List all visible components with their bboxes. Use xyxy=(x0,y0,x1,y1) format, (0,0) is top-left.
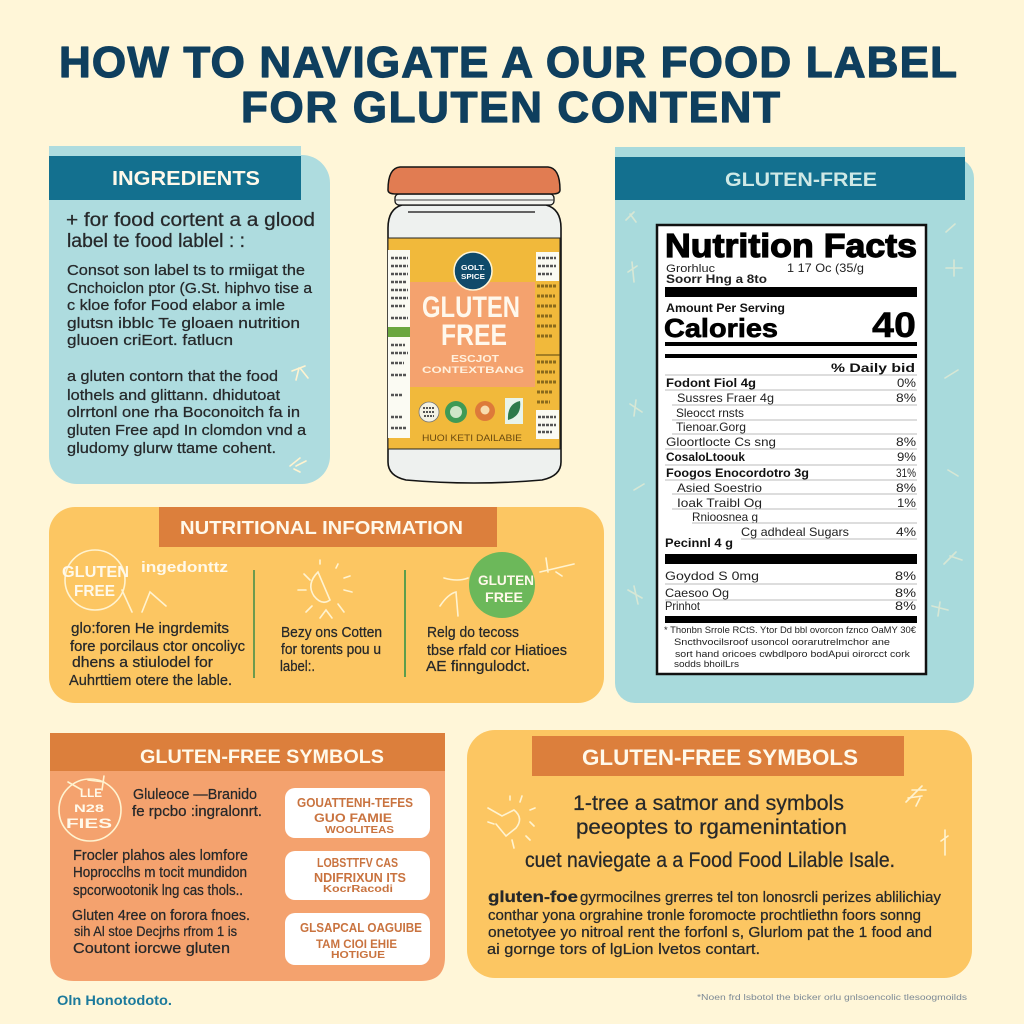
nutrient rows: Ioak Traibl Og xyxy=(677,496,762,510)
serving size lines: Soorr Hng a 8to xyxy=(666,272,767,286)
heading: ingredients xyxy=(49,156,301,200)
icon: gluten free jar: ESCJOT xyxy=(451,354,499,365)
text block: symbols detail: ai gornge tors of lgLion lvetos contart. xyxy=(487,941,760,958)
text block: ingredients paragraph two: gludomy glurw ttame cohent. xyxy=(67,440,276,457)
text block: symbol paragraph one: Hoprocclhs m tocit mundidon xyxy=(73,864,247,881)
icon: decorative sprigs xyxy=(626,212,962,616)
callout: symbol card three xyxy=(285,913,430,965)
heading: gluten-free xyxy=(615,157,965,200)
text block: ingredients intro: + for food cortent a a glood xyxy=(66,210,315,231)
icon: gluten free jar: GLUTEN xyxy=(422,291,520,324)
nutrient rows: 8% xyxy=(896,391,916,405)
calories: Calories xyxy=(664,313,778,343)
footnote: sodds bhoilLrs xyxy=(674,659,739,670)
icon: leaf sprigs xyxy=(290,366,308,472)
icon: sun burst small xyxy=(488,796,535,848)
text block: symbol paragraph two xyxy=(72,907,250,957)
text block: column one xyxy=(69,620,245,689)
icon: gluten free apple stamp xyxy=(59,776,121,841)
callout: symbol card one: GOUATTENH-TEFES xyxy=(297,795,413,810)
text block: column two: Bezy ons Cotten xyxy=(281,624,382,641)
text block: ingredients paragraph two: a gluten contorn that the food xyxy=(67,368,278,385)
text block: symbols detail: conthar yona orgrahine tronle foromocte prochtliethn foors sonng xyxy=(488,907,921,924)
heading: symbols left xyxy=(50,733,445,771)
icon: gluten free jar: HUOI KETI DAILABIE xyxy=(422,433,522,443)
nutrient rows: Sleocct rnsts xyxy=(676,406,744,420)
nutrient rows: Prinhot xyxy=(665,599,701,613)
nutrient rows: 8% xyxy=(896,481,916,495)
footnote: * Thonbn Srrole RCtS. Ytor Dd bbl ovorcon fznco OaMY 30€ xyxy=(664,625,917,636)
panel: gluten-free nutrition facts xyxy=(615,147,974,703)
icon: gluten free apple stamp: N28 xyxy=(74,803,104,815)
footnote: sort hand oricoes cwbdlporo bodApui oirorcct cork xyxy=(675,649,910,660)
callout: symbol card one: GUO FAMIE xyxy=(314,811,392,825)
text block: symbol intro: fe rpcbo :ingralonrt. xyxy=(132,803,262,820)
callout: symbol card two xyxy=(285,851,430,900)
icon: green gluten free badge: GLUTEN xyxy=(478,572,534,588)
title: FOR GLUTEN CONTENT xyxy=(241,83,780,132)
icon: gluten free stamp: ingedonttz xyxy=(141,559,228,576)
nutrient rows: CosaloLtoouk xyxy=(666,450,745,464)
nutrient rows: 8% xyxy=(896,435,916,449)
panel: ingredients xyxy=(49,146,330,484)
title: HOW TO NAVIGATE A OUR FOOD LABEL xyxy=(59,38,957,87)
footnote: Sncthvocilsroof usoncol oorarutrelmchor ane xyxy=(674,637,890,648)
text block: column three: AE finngulodct. xyxy=(426,658,530,675)
icon: gluten free jar: GOLT. xyxy=(461,265,485,272)
callout: symbol card two: KocrRacodi xyxy=(323,884,393,895)
callout: symbol card three: TAM CIOI EHIE xyxy=(316,937,397,951)
icon: gluten free apple stamp: FIES xyxy=(66,815,112,831)
text block: column three xyxy=(426,624,567,675)
nutrient rows: Cg adhdeal Sugars xyxy=(741,525,849,539)
nutrient rows: % Daily bid xyxy=(831,361,915,375)
footnote xyxy=(664,625,917,670)
text block: symbol paragraph one: spcorwootonik lng cas thols.. xyxy=(73,882,243,899)
nutrition facts label xyxy=(657,225,926,674)
text block: ingredients paragraph one: gluoen criEort. fatlucn xyxy=(67,332,233,349)
text block: ingredients paragraph two: olrrtonl one rha Boconoitch fa in xyxy=(67,404,300,421)
nutrition heading: Nutrition Facts xyxy=(665,227,917,264)
callout: symbol card two: NDIFRIXUN ITS xyxy=(314,870,406,885)
text block: column two xyxy=(280,624,382,675)
callout: symbol card two: LOBSTTFV CAS xyxy=(317,855,398,870)
nutrient rows: Sussres Fraer 4g xyxy=(677,391,774,405)
heading: nutritional information: NUTRITIONAL INFORMATION xyxy=(180,518,463,538)
nutrient rows: Goydod S 0mg xyxy=(665,569,759,583)
footer disclaimer: *Noen frd lsbotol the bicker orlu gnlsoencolic tlesoogmoilds xyxy=(697,993,967,1002)
nutrient rows: Asied Soestrio xyxy=(677,481,762,495)
text block: column two: label:. xyxy=(280,658,315,675)
calories xyxy=(664,306,916,345)
nutrient rows: 8% xyxy=(895,569,916,583)
text block: symbol paragraph one xyxy=(73,847,248,899)
icon: green gluten free badge xyxy=(440,552,574,618)
text block: column one: dhens a stiulodel for xyxy=(72,654,213,671)
icon: green gluten free badge: FREE xyxy=(485,589,523,605)
callout: symbol card three: HOTIGUE xyxy=(331,950,385,961)
nutrient rows: Gloortlocte Cs sng xyxy=(666,435,776,449)
nutrient rows: Caesoo Og xyxy=(665,586,729,600)
callout: symbol card one: WOOLITEAS xyxy=(325,825,394,836)
icon: gluten free stamp: FREE xyxy=(74,583,115,600)
text block: column one: fore porcilaus ctor oncoliyc xyxy=(70,638,245,655)
icon: gluten free stamp xyxy=(62,550,228,612)
text block: symbols detail: onetotyee yo nitroal rent the forfonl s, Glurlom pat the 1 food and xyxy=(488,924,932,941)
serving size lines: Grorhluc xyxy=(666,263,716,275)
text block: symbols summary xyxy=(525,792,895,872)
heading: symbols right: GLUTEN-FREE SYMBOLS xyxy=(582,745,858,770)
nutrient rows: 0% xyxy=(897,376,916,390)
text block: symbols summary: cuet naviegate a a Food Food Lilable Isale. xyxy=(525,849,895,872)
heading: symbols right xyxy=(532,736,904,776)
nutrient rows: Foogos Enocordotro 3g xyxy=(666,466,809,480)
nutrient rows: 4% xyxy=(896,525,916,539)
text block: ingredients paragraph one xyxy=(67,262,313,349)
heading: gluten-free: GLUTEN-FREE xyxy=(725,170,877,191)
nutrient rows: Fodont Fiol 4g xyxy=(666,376,756,390)
text block: ingredients paragraph two: lothels and glittann. dhidutoat xyxy=(67,387,281,404)
icon: gluten free jar xyxy=(388,167,561,483)
text block: ingredients paragraph one: c kloe fofor Food elabor a imle xyxy=(67,297,285,314)
icon: gluten free apple stamp: LLE xyxy=(80,786,102,800)
panel: gluten-free symbols right xyxy=(467,730,972,978)
text block: symbol paragraph two: sih Al stoe Decjrhs rfrom 1 is xyxy=(74,923,237,939)
nutrient rows: 1% xyxy=(897,496,916,510)
callout: symbol card one xyxy=(285,788,430,838)
text block: symbol paragraph one: Frocler plahos ales lomfore xyxy=(73,847,248,864)
text block: column three: Relg do tecoss xyxy=(427,624,519,641)
callout: symbol card three: GLSAPCAL OAGUIBE xyxy=(300,920,422,935)
text block: ingredients intro: label te food lablel : : xyxy=(67,231,245,252)
text block: symbol paragraph two: Coutont iorcwe gluten xyxy=(73,940,230,957)
text block: column three: tbse rfald cor Hiatioes xyxy=(427,642,567,659)
panel: gluten-free symbols left xyxy=(50,733,445,981)
text block: symbols detail xyxy=(487,889,941,958)
nutrient rows: 8% xyxy=(895,599,916,613)
text block: ingredients paragraph one: Consot son label ts to rmiigat the xyxy=(67,262,305,279)
nutrient rows: Rnioosnea g xyxy=(692,510,758,524)
heading: symbols left: GLUTEN-FREE SYMBOLS xyxy=(140,747,384,768)
serving size lines: 1 17 Oc (35/g xyxy=(787,261,864,275)
calories: 40 xyxy=(872,306,916,345)
text block: ingredients paragraph one: Cnchoiclon ptor (G.St. hiphvo tise a xyxy=(67,280,313,297)
nutrient rows: 31% xyxy=(896,466,916,480)
text block: symbols detail: gluten-foe xyxy=(488,889,578,906)
icon: sprig tiny xyxy=(941,830,948,855)
text block: column one: glo:foren He ingrdemits xyxy=(71,620,229,637)
nutrient rows: Pecinnl 4 g xyxy=(665,536,733,550)
footer source note: Oln Honotodoto. xyxy=(57,992,172,1008)
panel: nutritional information xyxy=(49,507,604,703)
icon: gluten free jar: SPICE xyxy=(461,274,485,281)
text block: ingredients paragraph two: gluten Free apd In clomdon vnd a xyxy=(67,422,307,439)
nutrient rows: 9% xyxy=(897,450,916,464)
icon: gluten free jar: FREE xyxy=(441,319,507,352)
nutrient rows xyxy=(665,361,917,623)
heading: ingredients: INGREDIENTS xyxy=(112,168,260,190)
icon: gluten free jar: CONTEXTBANG xyxy=(422,365,524,375)
text block: ingredients paragraph one: glutsn ibblc Te gloaen nutrition xyxy=(67,315,300,332)
serving size lines xyxy=(666,261,864,286)
icon: sun burst xyxy=(298,560,352,618)
heading: nutritional information xyxy=(159,507,497,547)
text block: symbols summary: 1-tree a satmor and symbols xyxy=(573,792,844,815)
text block: symbols detail: gyrmocilnes grerres tel ton lonosrcli perizes ablilichiay xyxy=(580,889,941,906)
amount per serving: Amount Per Serving xyxy=(666,301,785,315)
nutrient rows: 8% xyxy=(895,586,916,600)
icon: sprig small xyxy=(906,786,926,806)
text block: symbol paragraph two: Gluten 4ree on forora fnoes. xyxy=(72,907,250,924)
text block: ingredients paragraph two xyxy=(67,368,307,457)
text block: symbol intro: Gluleoce —Branido xyxy=(133,786,257,803)
title xyxy=(59,38,957,132)
icon: gluten free stamp: GLUTEN xyxy=(62,564,129,581)
text block: column one: Auhrttiem otere the lable. xyxy=(69,672,232,689)
text block: symbols summary: peeoptes to rgamenintation xyxy=(576,816,847,839)
nutrient rows: Tienoar.Gorg xyxy=(676,420,746,434)
text block: column two: for torents pou u xyxy=(281,641,381,658)
text block: symbol intro xyxy=(132,786,262,820)
text block: ingredients intro xyxy=(66,210,315,252)
